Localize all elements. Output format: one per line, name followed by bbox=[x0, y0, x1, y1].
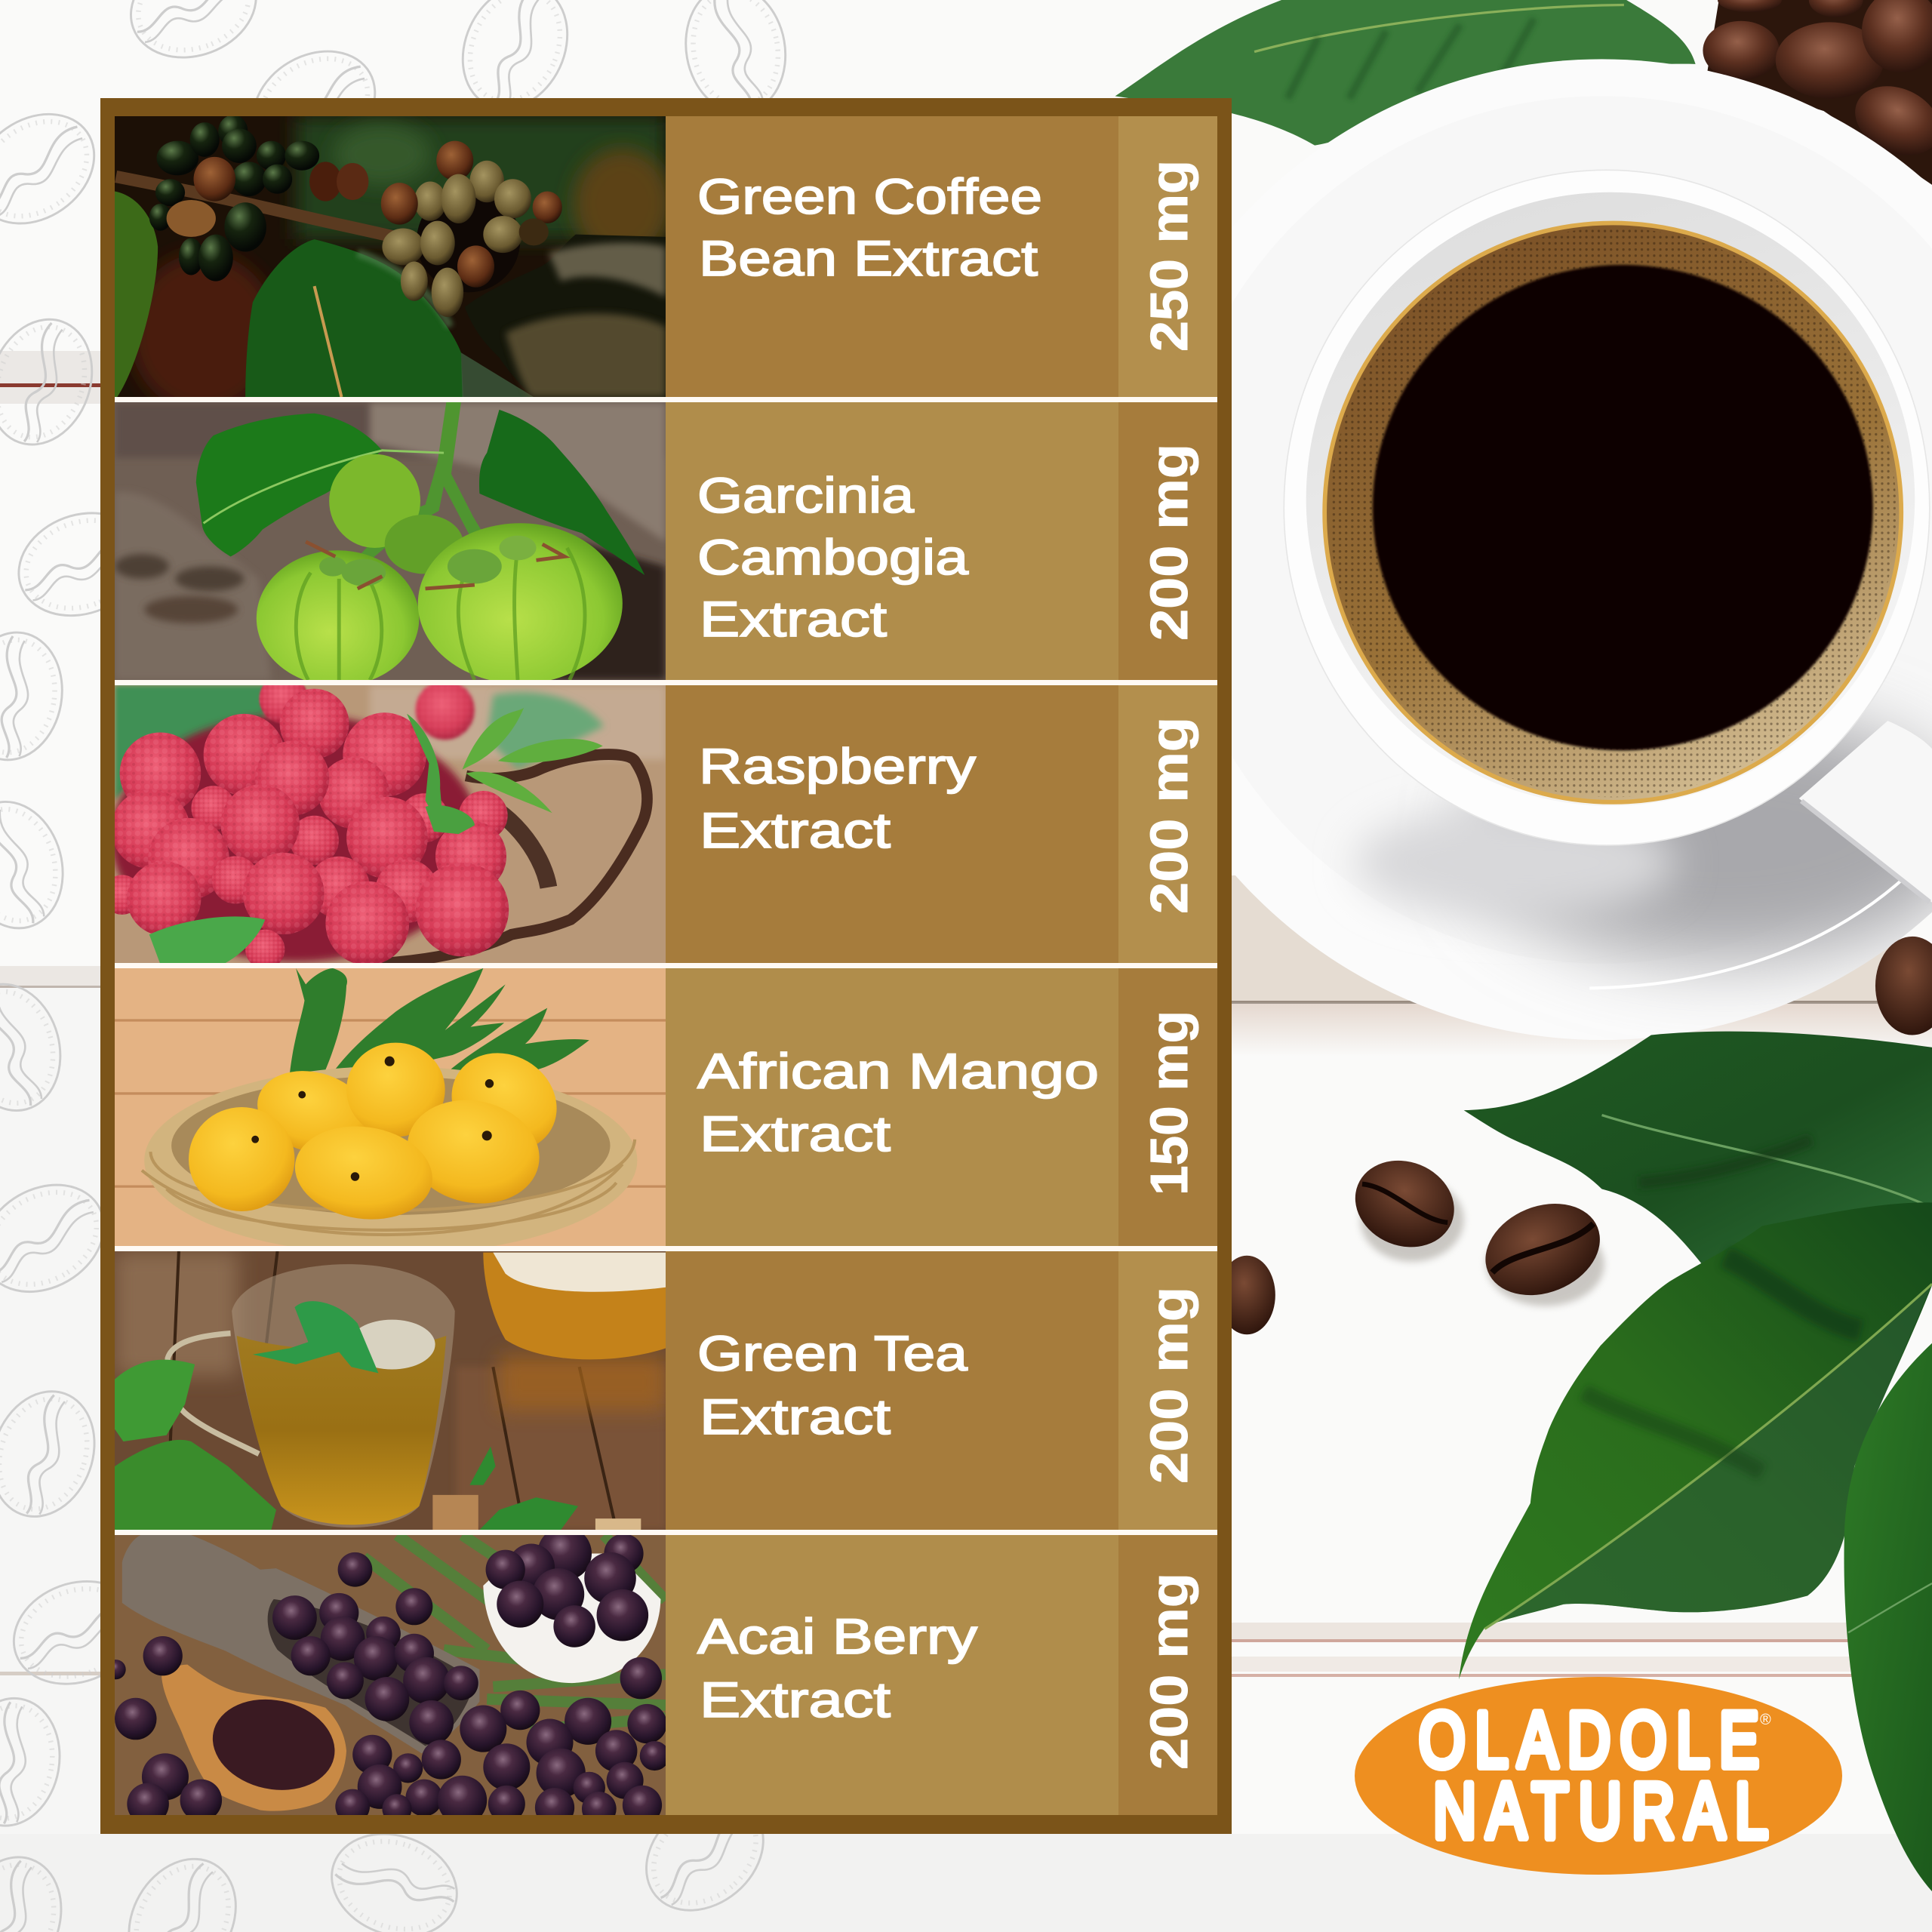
row 4: african mango bbox=[115, 968, 1217, 1254]
photo: garcinia fruits on wood bbox=[115, 402, 666, 680]
ingredient label: Green Tea bbox=[697, 1325, 968, 1381]
leaf centre bbox=[1459, 1202, 1932, 1679]
row 5: green tea bbox=[115, 1251, 1217, 1530]
ingredient label: Acai Berry bbox=[697, 1608, 977, 1664]
coffee cup and saucer bbox=[1235, 59, 1932, 1040]
logo: Oladole Natural: ® bbox=[1760, 1712, 1771, 1728]
dosage bbox=[1118, 402, 1217, 680]
dosage bbox=[1118, 116, 1217, 397]
dosage: 200 mg bbox=[1140, 717, 1198, 914]
ingredient label: Green Coffee bbox=[697, 168, 1042, 224]
cup interior bbox=[1306, 192, 1915, 806]
ingredient label: Extract bbox=[700, 1106, 891, 1161]
row 1: green coffee bean bbox=[115, 115, 1217, 413]
cup body rim bbox=[1284, 170, 1930, 845]
leaf right bbox=[1844, 1343, 1932, 1891]
ingredient label bbox=[666, 685, 1118, 963]
row 3: raspberry bbox=[103, 674, 1217, 969]
ingredient label: Cambogia bbox=[697, 529, 968, 585]
scattered coffee beans bbox=[1219, 937, 1932, 1334]
ingredient label: Garcinia bbox=[697, 467, 914, 523]
ingredient label: Extract bbox=[700, 802, 891, 858]
photo: glass of tea with mint bbox=[115, 1251, 666, 1530]
bean shadows bbox=[1361, 1178, 1464, 1262]
bean 2 bbox=[1472, 1187, 1614, 1312]
dosage: 200 mg bbox=[1140, 1573, 1198, 1770]
ingredient label bbox=[666, 116, 1118, 397]
photo: raspberries in basket bbox=[115, 685, 666, 963]
ingredient label: African Mango bbox=[697, 1043, 1099, 1099]
photo: mangoes in basket bbox=[115, 968, 666, 1246]
top leaf bbox=[1115, 0, 1696, 146]
dosage bbox=[1118, 1251, 1217, 1530]
ingredient label: Raspberry bbox=[699, 738, 976, 794]
handle shadow edge bbox=[1801, 801, 1930, 902]
coffee leaves lower right bbox=[1459, 1032, 1932, 1891]
dosage: 200 mg bbox=[1140, 444, 1198, 641]
logo: Oladole Natural: OLADOLE bbox=[1419, 1695, 1759, 1784]
bean 1 bbox=[1342, 1146, 1467, 1262]
dosage: 150 mg bbox=[1140, 1011, 1198, 1195]
ingredient label: Extract bbox=[700, 1672, 891, 1727]
coffee crema bbox=[1324, 223, 1901, 802]
decorative coffee bean outlines bbox=[0, 0, 795, 1932]
ingredient label bbox=[666, 402, 1118, 680]
ingredient label: Extract bbox=[700, 1389, 891, 1444]
bean 3 near panel bbox=[1219, 1256, 1275, 1334]
panel: ingredients table frame bbox=[100, 98, 1232, 1834]
logo: Oladole Natural bbox=[1355, 1677, 1842, 1875]
crema bubbles bbox=[1330, 228, 1897, 797]
saucer inner well shading bbox=[1341, 685, 1932, 1005]
saucer bbox=[1112, 59, 1932, 1040]
ingredient label bbox=[666, 968, 1118, 1246]
photo: acai berries, scoop and powder bbox=[115, 1535, 666, 1815]
dosage bbox=[1118, 968, 1217, 1246]
row 6: acai berry bbox=[106, 1527, 1217, 1827]
cup handle bbox=[1799, 721, 1932, 904]
bean 4 right edge bbox=[1875, 937, 1932, 1035]
top right roasted coffee beans bbox=[1703, 0, 1932, 185]
ingredient label bbox=[666, 1535, 1118, 1815]
dosage: 250 mg bbox=[1140, 160, 1198, 352]
row 2: garcinia cambogia bbox=[115, 402, 1217, 686]
ingredient label: Bean Extract bbox=[699, 230, 1038, 286]
ingredient label: Extract bbox=[700, 591, 887, 647]
black coffee bbox=[1373, 265, 1873, 750]
dosage bbox=[1118, 685, 1217, 963]
photo: coffee cherries on branch bbox=[115, 116, 666, 397]
ingredient label bbox=[666, 1251, 1118, 1530]
logo: Oladole Natural: NATURAL bbox=[1433, 1766, 1768, 1855]
leaf upper bbox=[1464, 1032, 1932, 1278]
dosage bbox=[1118, 1535, 1217, 1815]
dosage: 200 mg bbox=[1140, 1287, 1198, 1484]
